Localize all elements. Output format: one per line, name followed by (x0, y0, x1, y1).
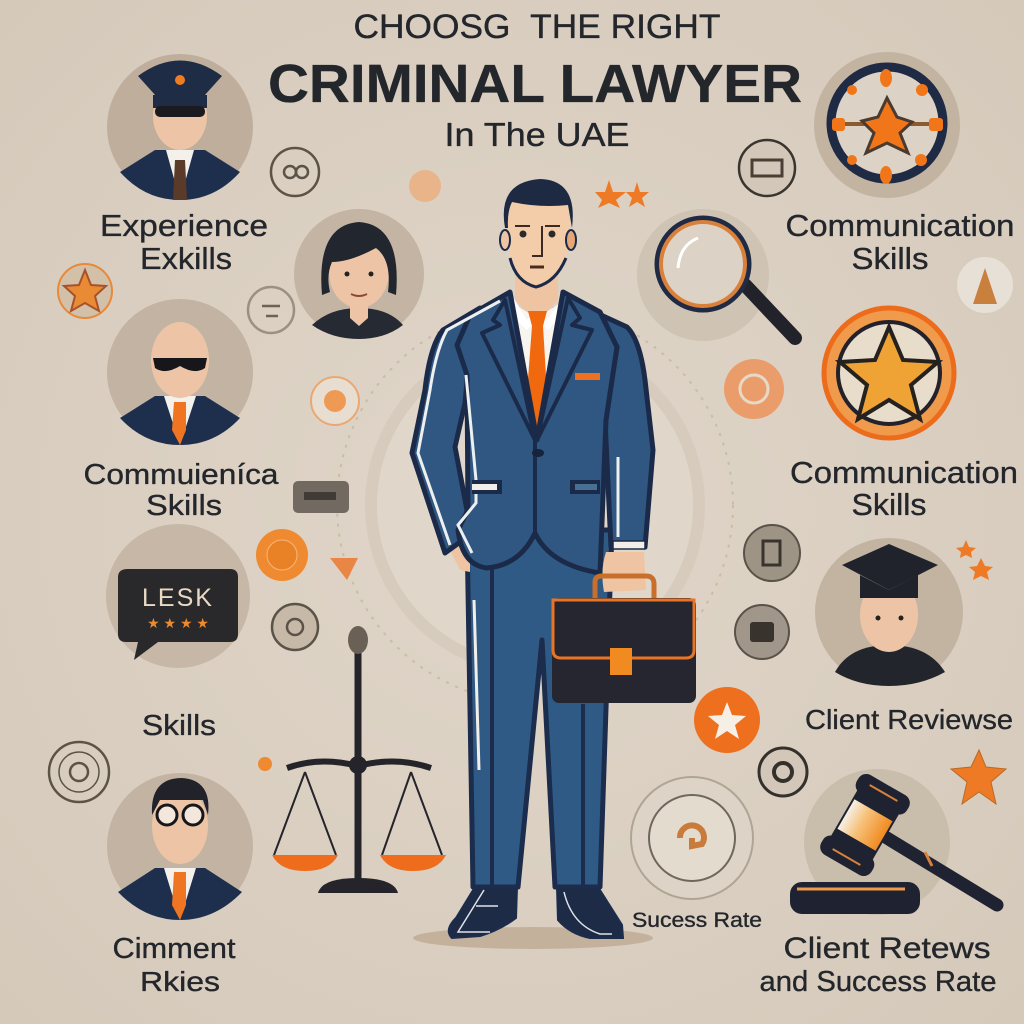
label: client reviews: Client Reviewse (805, 704, 1013, 735)
label: experience: Exkills (140, 241, 232, 276)
label: client reviews and success rate: and Success Rate (760, 966, 996, 998)
label: comment risks: Cimment (112, 933, 236, 965)
left arm (412, 308, 480, 553)
neck and shirt (515, 268, 558, 322)
hand (602, 552, 646, 592)
label: experience: Experience (100, 208, 268, 243)
title: CHOOSG THE RIGHT (354, 8, 720, 46)
icon: coin ring (631, 777, 753, 899)
icon: right stars (951, 540, 1006, 804)
icon: small right chips (724, 140, 1014, 796)
label: communication left (84, 459, 279, 522)
label: comment risks: Rkies (140, 966, 220, 997)
label: skills: Skills (142, 710, 216, 742)
suit details (533, 440, 537, 533)
label: communication left: Commuieníca (84, 459, 279, 491)
shirt collar (507, 292, 566, 330)
label: communication right lower: Skills (852, 487, 926, 522)
panel: review speech bubble: LESK (142, 584, 214, 612)
label: client reviews and success rate: Client Retews (784, 932, 990, 965)
panel: review speech bubble: ★ ★ ★ ★ (147, 615, 209, 631)
label: communication right lower (790, 455, 1018, 522)
label: comment risks (112, 933, 236, 997)
icon: magnifying glass (637, 209, 795, 341)
label: communication right top: Skills (852, 241, 928, 276)
panel: experience portrait (107, 54, 253, 200)
label: communication right lower: Communication (790, 455, 1018, 490)
jacket body (457, 292, 617, 573)
icon: stars near head (595, 180, 649, 208)
panel: right gold star badge (824, 308, 954, 438)
icon: scales of justice (258, 626, 446, 893)
briefcase (595, 576, 654, 600)
illustration: lawyer figure (412, 179, 696, 949)
tie (527, 311, 547, 430)
panel: woman portrait (294, 209, 424, 339)
title: In The UAE (444, 116, 630, 153)
label: client reviews and success rate (760, 932, 996, 998)
panel: top right star badge (814, 52, 960, 198)
trousers (467, 530, 612, 887)
label: success rate: Sucess Rate (632, 909, 762, 932)
label: communication right top (786, 208, 1014, 276)
icon: small orange badges (256, 170, 441, 581)
icon: left star badge (58, 264, 112, 318)
label: communication left: Skills (146, 490, 222, 522)
icon: orange star button (694, 687, 760, 753)
panel: graduate portrait (815, 538, 963, 686)
label: communication right top: Communication (786, 208, 1014, 243)
title: CRIMINAL LAWYER (268, 54, 802, 114)
shoes (449, 887, 517, 938)
hand in pocket (450, 540, 470, 572)
panel: masked man portrait (107, 299, 253, 445)
panel: review speech bubble (106, 524, 250, 668)
right arm (590, 310, 653, 547)
icon: small circle chips left (49, 148, 319, 802)
panel: glasses man portrait (107, 773, 253, 920)
title (268, 8, 802, 153)
label: experience (100, 208, 268, 276)
head (506, 198, 571, 287)
panel: gavel (790, 769, 997, 915)
lapels (482, 300, 535, 440)
